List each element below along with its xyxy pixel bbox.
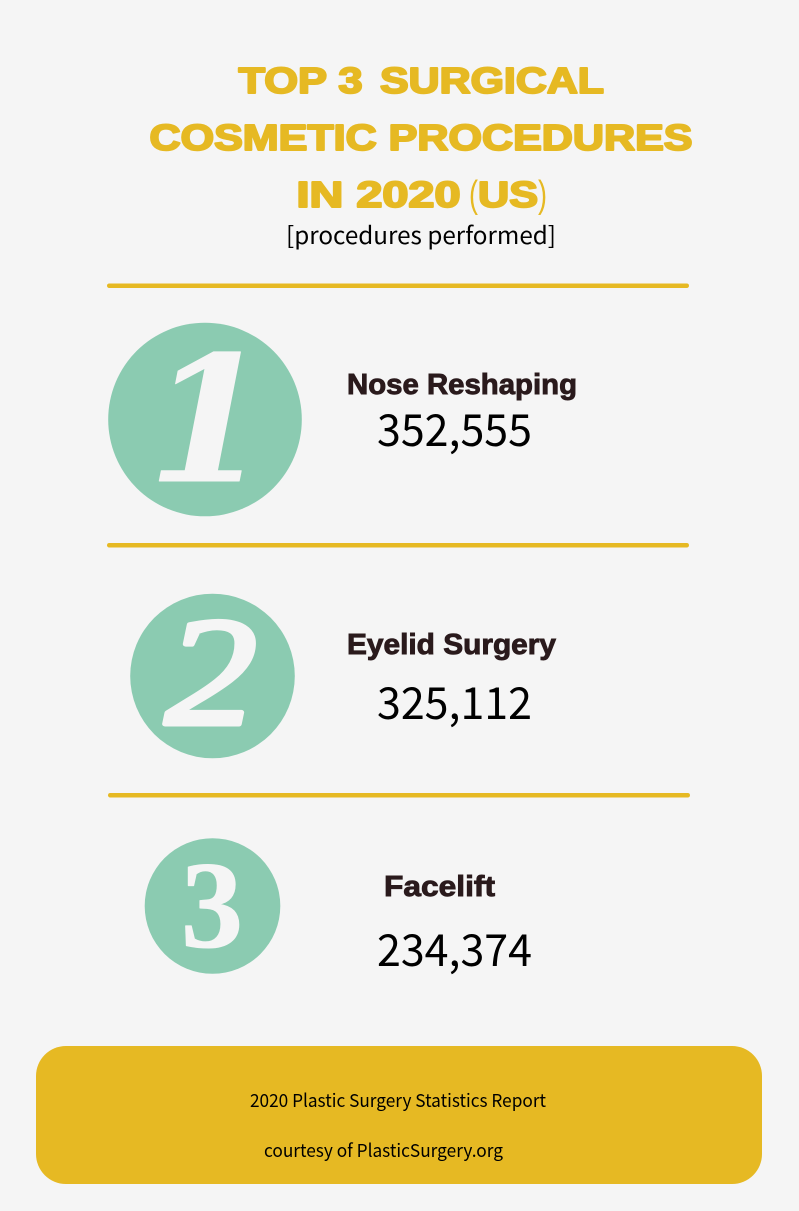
value: 325,112: 325,112: [377, 668, 532, 732]
icon: number 3 badge: [145, 837, 280, 974]
panel: rank 2: [130, 586, 556, 758]
icon: number 2 badge: 2: [165, 586, 257, 758]
title: COSMETIC PROCEDURES: [150, 117, 692, 158]
text: report name: 2020 Plastic Surgery Statistics Report: [250, 1087, 546, 1113]
title: US: [478, 174, 538, 215]
value: 352,555: 352,555: [377, 395, 532, 459]
icon: number 3 badge: 3: [181, 837, 243, 974]
title: ): [538, 174, 547, 216]
label: nose reshaping: Nose Reshaping: [347, 369, 577, 401]
label: eyelid surgery: Eyelid Surgery: [347, 629, 556, 661]
value: 234,374: 234,374: [377, 915, 532, 979]
icon: number 2 badge: [130, 586, 295, 758]
icon: number 1 badge: [108, 319, 302, 523]
panel: source footer: [36, 1046, 762, 1184]
title: IN 2020: [296, 174, 460, 215]
title: [150, 60, 692, 216]
title: (: [469, 174, 478, 216]
text: courtesy line: courtesy of PlasticSurgery.org: [264, 1137, 503, 1163]
title: SURGICAL: [380, 60, 604, 101]
subtitle: [procedures performed]: [286, 216, 556, 251]
title: TOP 3: [238, 60, 362, 101]
icon: number 1 badge: 1: [148, 319, 269, 523]
label: facelift: Facelift: [384, 871, 495, 903]
panel: rank 1: [108, 319, 577, 523]
panel: rank 3: [145, 837, 532, 979]
